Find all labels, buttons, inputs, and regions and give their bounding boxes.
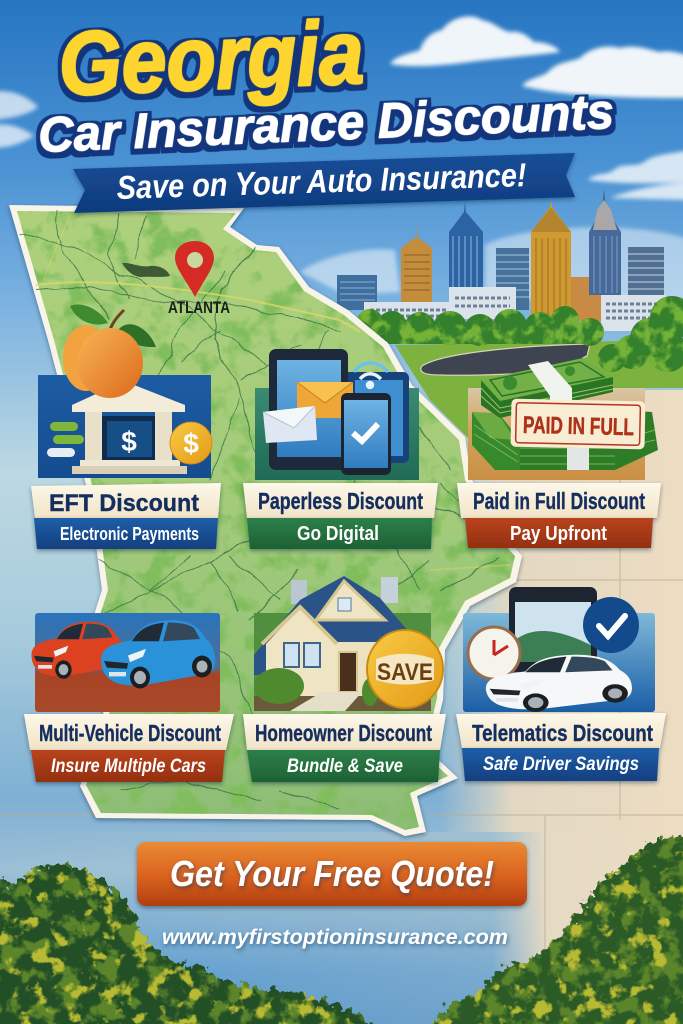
icon: save coin: SAVE <box>377 659 433 686</box>
sublabel: Insure Multiple Cars: Insure Multiple Cars <box>51 756 206 777</box>
tree line <box>357 296 683 372</box>
label: Homeowner Discount: Homeowner Discount <box>255 720 432 746</box>
sublabel: Electronic Payments: Electronic Payments <box>60 524 199 544</box>
card image <box>463 613 655 712</box>
icon: house <box>254 576 431 711</box>
panel: Homeowner discount <box>243 576 446 782</box>
icon: coin: $ <box>183 428 199 459</box>
label: Atlanta: ATLANTA <box>168 298 230 317</box>
card image <box>255 388 419 480</box>
icon: back phone <box>335 372 409 463</box>
sublabel: Go Digital: Go Digital <box>297 523 379 545</box>
label: Paperless Discount: Paperless Discount <box>258 488 423 514</box>
sublabel: Safe Driver Savings: Safe Driver Savings <box>483 754 639 775</box>
label: Telematics Discount <box>456 713 666 748</box>
sublabel: Bundle & Save <box>247 750 440 782</box>
clouds <box>0 16 683 300</box>
icon: device <box>509 587 597 672</box>
button text: Get Your Free Quote! <box>170 853 494 894</box>
icon: tablet <box>269 349 348 470</box>
upper stack <box>481 377 613 418</box>
label: EFT Discount: EFT Discount <box>49 490 199 517</box>
skyline <box>337 188 666 331</box>
sublabel: Safe Driver Savings <box>462 748 659 781</box>
icon: cash stacks <box>472 358 658 470</box>
panel: Multi-Vehicle discount <box>24 613 234 782</box>
bill edge lines <box>474 425 655 464</box>
building: left blue <box>337 275 377 310</box>
grass and road <box>395 340 683 440</box>
building: large gold tower <box>531 200 571 316</box>
icon: clock <box>468 627 520 679</box>
panel: Telematics discount <box>456 587 666 781</box>
icon: check badge <box>583 597 639 653</box>
sublabel: Electronic Payments <box>34 518 218 549</box>
label: Multi-Vehicle Discount <box>24 714 234 750</box>
icon: green bars <box>47 422 84 457</box>
panel: Paperless discount <box>243 349 438 549</box>
panel: EFT discount <box>31 375 221 549</box>
ribbon text: Save on Your Auto Insurance! <box>116 156 527 206</box>
label: Paperless Discount <box>243 483 438 518</box>
georgia map <box>9 205 522 836</box>
icon: bank: $ <box>121 426 137 457</box>
buildings: low white <box>364 287 666 331</box>
label: Multi-Vehicle Discount: Multi-Vehicle Discount <box>39 720 221 746</box>
icon: save coin <box>367 630 443 708</box>
sublabel: Insure Multiple Cars <box>31 750 225 782</box>
band <box>528 361 572 400</box>
card image <box>38 375 211 478</box>
lower left stack <box>472 412 520 470</box>
building: slate tower <box>496 248 529 310</box>
sublabel: Pay Upfront <box>465 518 653 548</box>
label: Homeowner Discount <box>243 714 446 750</box>
icon: red car <box>31 622 125 679</box>
icon: coin <box>170 422 212 464</box>
foliage: bottom left <box>0 864 390 1024</box>
roads and rivers <box>20 210 500 810</box>
title: Car Insurance Discounts: Car Insurance Discounts <box>37 85 615 163</box>
icon: blue car <box>101 620 215 688</box>
building: gold tower <box>401 222 432 302</box>
card image <box>35 613 220 712</box>
icon: peach <box>63 304 156 398</box>
building: blue tower <box>449 202 483 290</box>
icon: orange envelope <box>297 382 353 418</box>
icon: paid in full sign: PAID IN FULL <box>523 412 634 441</box>
building: orange block <box>571 277 608 321</box>
icon: white envelope <box>263 406 317 443</box>
lower right stack <box>612 410 658 470</box>
ribbon banner <box>73 153 575 213</box>
website url: www.myfirstoptioninsurance.com <box>162 926 508 949</box>
label: EFT Discount <box>31 483 221 518</box>
icon: paid in full sign <box>511 399 645 449</box>
lower centre stack <box>505 440 620 470</box>
foliage: bottom right <box>425 835 683 1024</box>
map pin: Atlanta <box>175 241 214 297</box>
building: grey-blue spire <box>589 188 621 295</box>
building: right tower <box>628 247 664 295</box>
sublabel: Go Digital <box>247 518 432 549</box>
icon: phone <box>341 393 391 475</box>
sublabel: Bundle & Save: Bundle & Save <box>287 756 403 777</box>
title: Georgia: Georgia <box>57 3 366 115</box>
label: Paid in Full Discount <box>457 483 661 518</box>
card image <box>468 388 645 480</box>
sublabel: Pay Upfront: Pay Upfront <box>510 523 607 545</box>
card image <box>254 613 431 711</box>
icon: wifi <box>354 363 388 388</box>
panel: Paid in Full discount <box>457 358 661 548</box>
icon: bank <box>72 381 187 474</box>
icon: white car <box>486 655 632 712</box>
call to action button <box>137 842 527 906</box>
